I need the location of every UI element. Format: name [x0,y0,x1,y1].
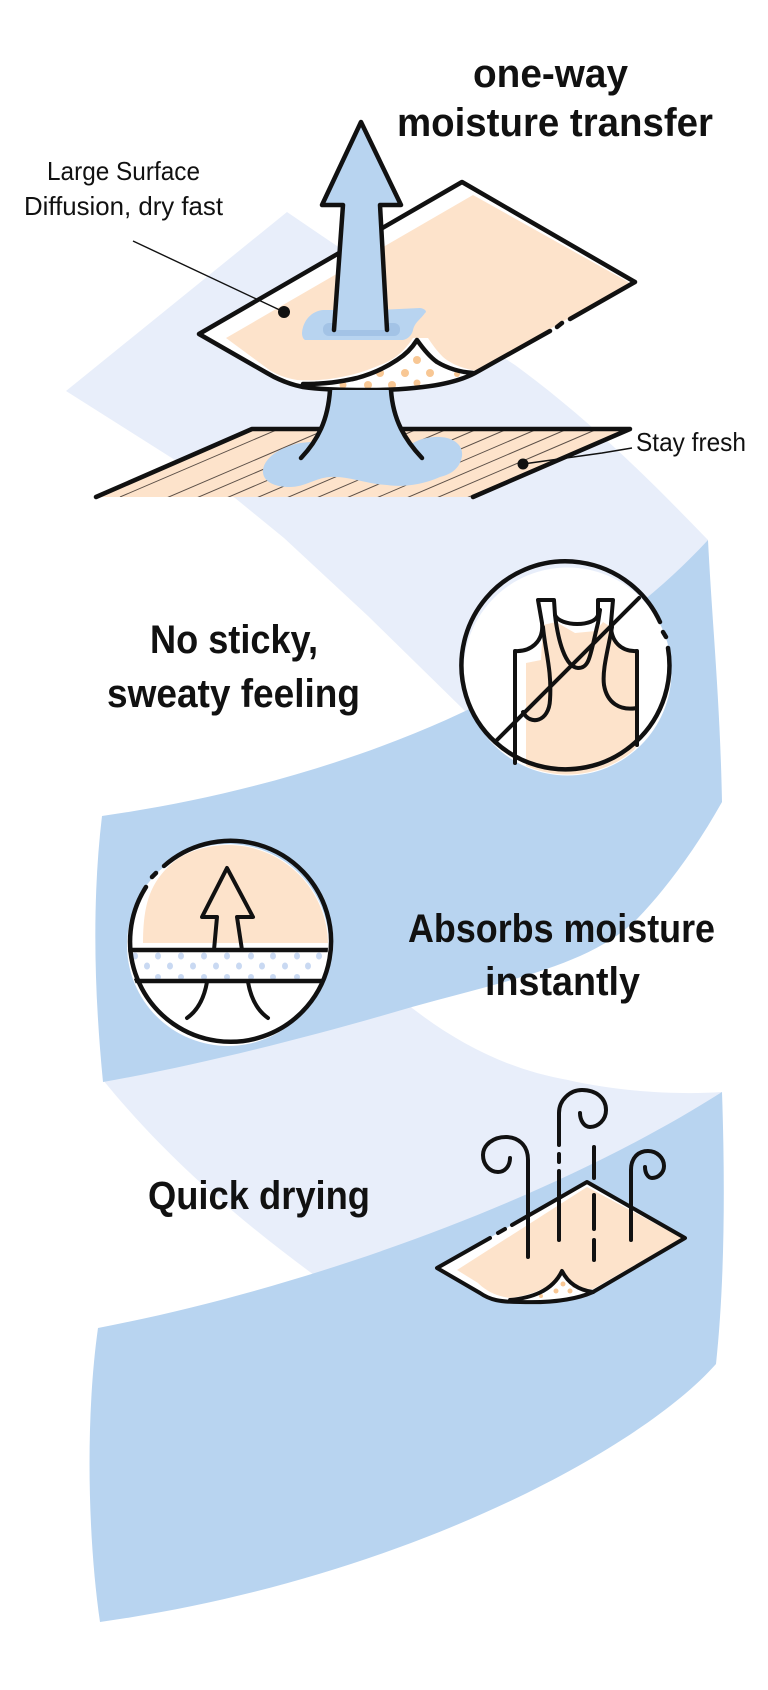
background ribbon: blue middle band [95,540,722,1082]
icon: crossed-out tank top in circle [461,561,672,790]
heading: no sticky, sweaty feeling: No sticky, [150,618,318,662]
heading: no sticky, sweaty feeling: sweaty feeling [107,672,360,716]
background ribbon: pale upper band [66,212,708,760]
heading: absorbs moisture instantly: Absorbs moisture [408,907,715,951]
title: one-way moisture transfer [397,52,713,145]
label: stay fresh with leader line: Stay fresh [636,427,746,457]
lower fabric layer with hatching [94,426,632,500]
arrow: moisture rising through fabric [301,122,422,458]
label: large surface diffusion: Large Surface [47,156,200,186]
background ribbon: blue lower band [90,1092,724,1622]
heading: quick drying: Quick drying [148,1174,370,1218]
heading: no sticky, sweaty feeling [107,618,360,716]
icon: drying fabric with steam [437,1090,685,1302]
heading: absorbs moisture instantly [408,907,715,1004]
heading: absorbs moisture instantly: instantly [485,960,641,1004]
title: one-way moisture transfer: one-way [473,52,629,96]
title: one-way moisture transfer: moisture transfer [397,101,713,145]
label: large surface diffusion: Diffusion, dry fast [24,191,224,221]
upper fabric sheet with curled corner [199,182,635,390]
background ribbon: pale lower band [103,995,722,1290]
leader line to sheet surface [133,241,290,318]
icon: upward absorption through fabric in circle [120,838,340,1046]
label: large surface diffusion [24,156,224,221]
label: stay fresh with leader line [518,427,746,470]
